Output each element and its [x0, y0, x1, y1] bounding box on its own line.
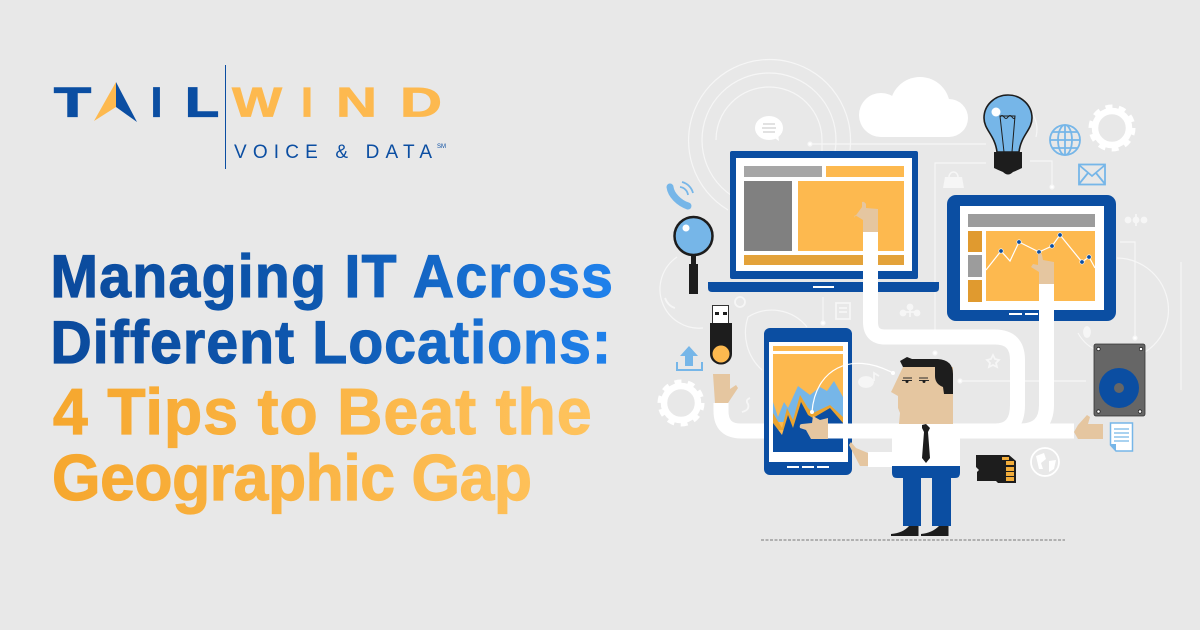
icon: document — [1110, 423, 1132, 451]
man — [891, 357, 960, 536]
background network lines — [660, 59, 1181, 390]
logo wordmark: WIND: D — [400, 78, 442, 126]
service mark: SM — [437, 144, 446, 150]
logo wordmark: WIND — [232, 78, 442, 126]
neck and face — [891, 367, 953, 424]
hands — [713, 202, 1103, 466]
logo wordmark: TAIL: L — [185, 78, 219, 126]
legs and trousers — [892, 466, 960, 526]
icon: gear top right — [1090, 106, 1134, 150]
icon: shopping bag — [943, 172, 964, 188]
hair — [900, 357, 953, 394]
logo wordmark: TAIL: T — [54, 78, 91, 126]
cloud — [859, 77, 968, 137]
title line 2: Different Locations: — [50, 310, 611, 376]
logo: Tailwind Voice & Data — [54, 65, 446, 169]
logo wordmark: WIND: N — [336, 78, 377, 126]
hand pointing at monitor — [1031, 253, 1054, 284]
eyes and brows — [902, 378, 929, 380]
open hand right — [1074, 415, 1103, 439]
usb drive — [710, 306, 732, 364]
title line 4: Geographic Gap — [52, 441, 532, 514]
hand pointing at left tablet — [800, 416, 828, 439]
icon: envelope — [1079, 164, 1105, 184]
icon: light bulb — [984, 95, 1032, 174]
title line 3: 4 Tips to Beat the — [53, 375, 592, 448]
small line icons — [665, 214, 1146, 412]
logo wordmark: TAIL: I — [151, 78, 162, 126]
hand holding left tablet — [849, 442, 868, 466]
hard drive — [1094, 344, 1145, 416]
monitor tablet with line chart — [947, 195, 1116, 321]
title line 1: Managing IT Across — [50, 244, 613, 310]
hand pointing at laptop — [854, 202, 878, 232]
logo wordmark: WIND: I — [301, 78, 313, 126]
arms of the man — [721, 232, 1074, 460]
title — [50, 244, 613, 514]
shirt — [892, 424, 960, 466]
logo tagline: VOICE & DATA — [234, 142, 432, 163]
icon: gear left — [660, 382, 702, 424]
logo wordmark: TAIL — [54, 78, 219, 126]
left tablet with mountain chart — [764, 328, 895, 475]
shoes — [891, 526, 948, 536]
icon: earth — [1031, 448, 1059, 476]
icon: upload — [677, 346, 702, 370]
sd card — [976, 455, 1016, 483]
icon: phone — [670, 182, 693, 206]
icon: chat bubble — [755, 116, 783, 141]
laptop — [708, 151, 939, 292]
icon: magnifying glass — [674, 217, 712, 294]
logo wordmark: WIND: W — [232, 78, 282, 126]
open hand left — [713, 374, 738, 403]
ground dashed line — [761, 539, 1065, 541]
logo divider — [225, 65, 226, 169]
tie — [922, 424, 930, 463]
icon: globe — [1050, 125, 1080, 155]
